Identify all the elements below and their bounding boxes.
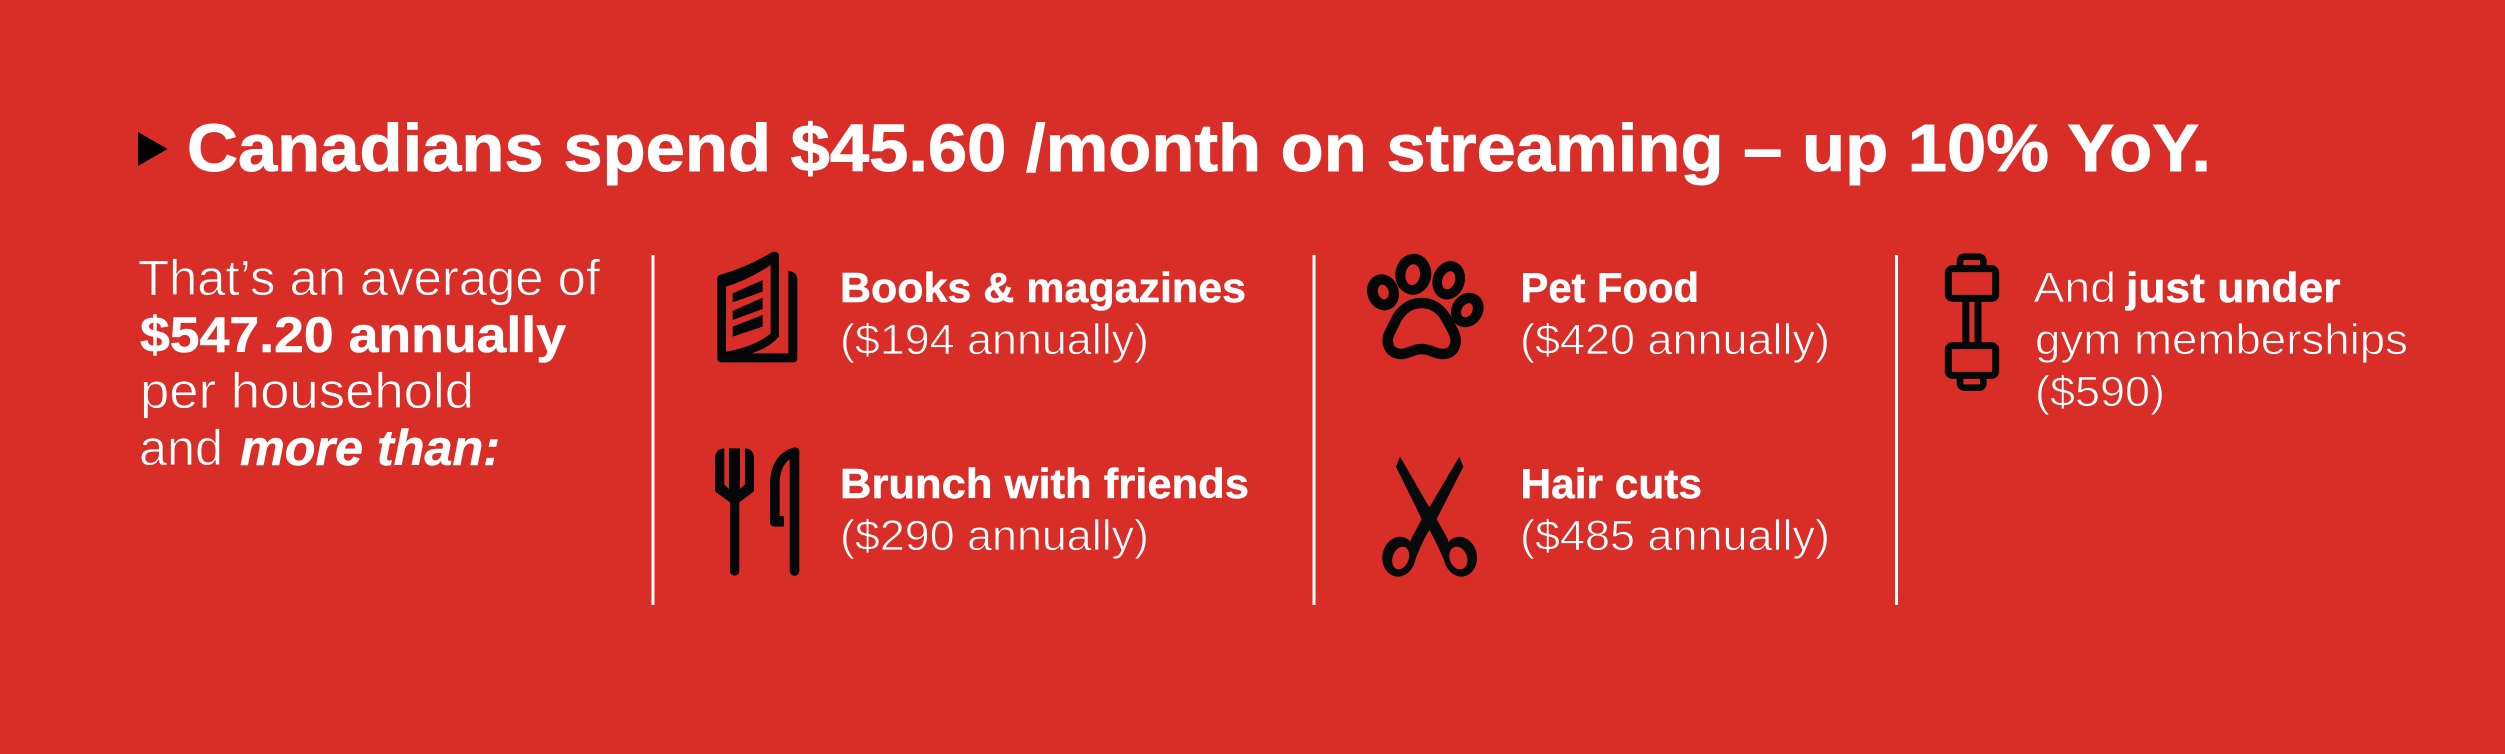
text: pet food value: ($420 annually) [1520,316,1830,364]
title: Canadians spend $45.60 /month on streaming – up 10% YoY. [187,111,2211,186]
text: hair cuts value: Hair cuts [1520,460,1702,507]
text block: annual average intro: per household [140,363,474,419]
text block: annual average intro: and [139,420,223,476]
text: books and magazines value [840,264,1246,364]
panel: brunch with friends [715,447,1249,576]
icon: open book [717,252,797,362]
text: books and magazines value: Books & magazines [840,264,1246,311]
panel: books and magazines [717,252,1246,364]
text: gym memberships value: ($590) [2035,368,2165,416]
text: gym memberships value: just under [2125,264,2340,311]
text: brunch with friends value: Brunch with friends [840,460,1249,507]
text: hair cuts value [1520,460,1830,560]
panel: gym memberships [1948,257,2408,416]
text: hair cuts value: ($485 annually) [1520,512,1830,560]
text: pet food value: Pet Food [1520,264,1699,311]
text: gym memberships value: And [2034,264,2116,312]
panel: hair cuts [1379,457,1830,579]
text: brunch with friends value: ($290 annually) [840,512,1149,560]
text block: annual average intro [138,250,600,476]
icon: paw print [1362,252,1490,354]
text: gym memberships value [2034,264,2408,416]
text: brunch with friends value [840,460,1249,560]
panel: pet food [1362,252,1830,364]
icon: fork and knife [715,447,799,576]
text: books and magazines value: ($194 annually) [840,316,1149,364]
text: pet food value [1520,264,1830,364]
icon: heading arrow marker [138,132,168,166]
text: gym memberships value: gym memberships [2035,316,2408,364]
text block: annual average intro: That’s an average of [138,250,600,306]
icon: dumbbell [1948,257,1996,388]
text block: annual average intro: more than: [240,420,500,476]
icon: scissors [1379,457,1480,579]
text block: annual average intro: $547.20 annually [140,307,566,363]
